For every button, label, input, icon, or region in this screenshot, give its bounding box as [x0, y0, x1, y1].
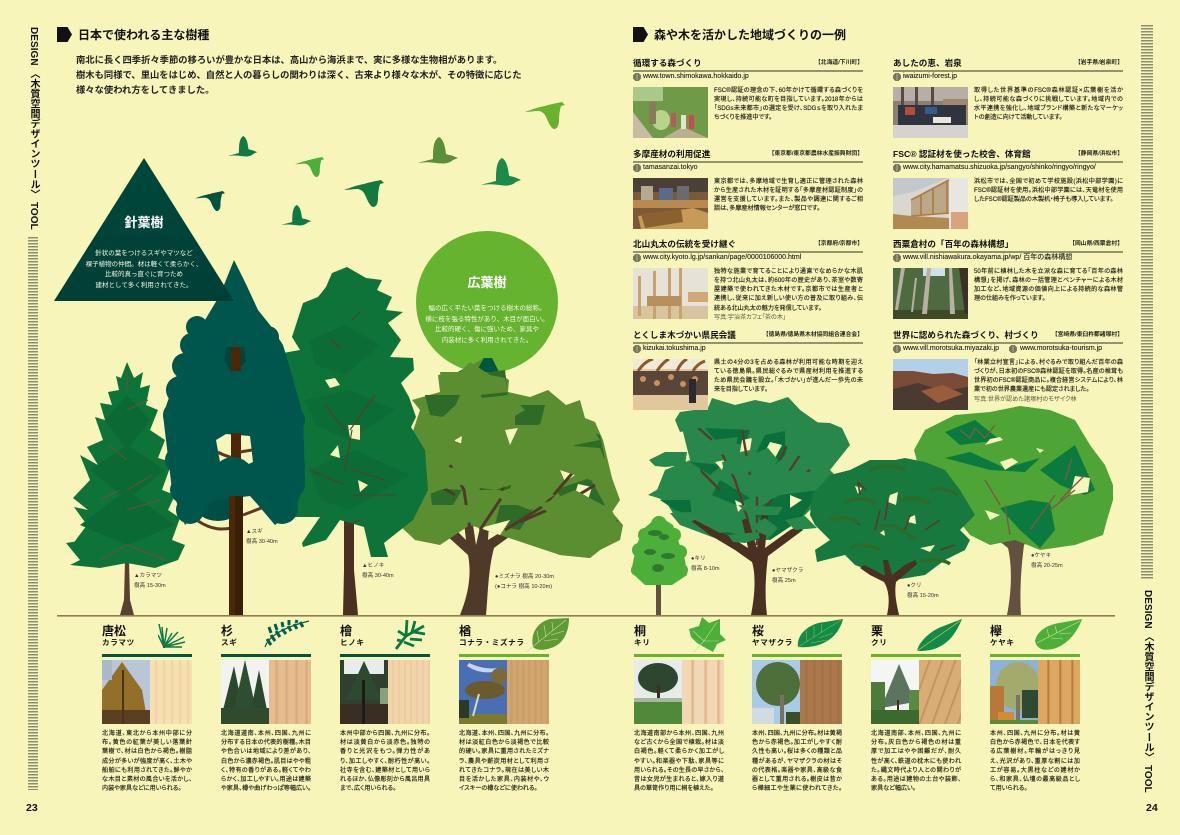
tree label: kiri: 樹高 8-10m — [691, 566, 720, 572]
species: keyaki: ら、和家具、仏壇の最高級品とし — [990, 776, 1080, 783]
species: kiri: 白褐色。軽くて柔らかく加工がし — [634, 748, 724, 755]
species: sugi: スギ — [221, 638, 237, 647]
card: morotsuka — [893, 330, 1123, 410]
card: tama: tamasanzai.tokyo — [643, 164, 697, 171]
species: kiri: など古くから全国で植栽。材は淡 — [634, 739, 724, 746]
species: konara mizunara: イスキーの樽などに使われる。 — [459, 785, 537, 792]
species: kuri: 家具など幅広い。 — [871, 785, 916, 792]
card: iwaizumi: トの創造に向けて活動しています。 — [974, 114, 1062, 121]
species: sugi: く、特有の香りがある。軽くてやわ — [221, 767, 311, 774]
card: nishiawakura: 【岡山県/西粟倉村】 — [1069, 241, 1123, 247]
species: kiri: 具の箪笥作り用に桐を植えた。 — [634, 785, 713, 792]
card: iwaizumi: あしたの恵、岩泉 — [893, 58, 962, 68]
species: konara mizunara: ラ、農具や薪炭用材として利用さ — [459, 758, 549, 765]
conifer description: 建材として多く利用されてきた。 — [96, 282, 192, 288]
card: nishiawakura: 構想」を掲げ、森林の一括管理とベンチャーによる木材 — [974, 277, 1123, 284]
card: shimokawa: 循環する森づくり — [633, 58, 702, 68]
flock of birds — [195, 102, 565, 225]
card: iwaizumi: 【岩手県/岩泉町】 — [1075, 60, 1123, 66]
card: tokushima — [633, 330, 863, 410]
tree label: kiri — [691, 556, 720, 572]
species: hinoki: 材は淡黄白から淡赤色。独特の — [340, 739, 430, 746]
tree: karamatsu larch — [66, 362, 185, 615]
species: karamatsu: 唐松 — [102, 624, 126, 638]
species: karamatsu: 成分が多いが強度が高く、土木や — [102, 758, 192, 765]
conifer description — [86, 250, 202, 288]
leaf icon: cherry — [797, 619, 843, 649]
species: kuri: 性が高く、鉄道の枕木にも使われ — [871, 758, 961, 765]
species: yamazakura: ヤマザクラ — [752, 638, 793, 647]
photo: cedar — [221, 660, 269, 724]
species: yamazakura: 本州、四国、九州に分布。材は黄褐 — [752, 730, 842, 737]
card: shimokawa: 実現し、持続可能な町を目指しています。2018年からは — [714, 96, 863, 103]
photo: crowd in wooden hall — [633, 359, 708, 410]
tree label: karamatsu: ▲カラマツ — [134, 573, 162, 579]
species: karamatsu: カラマツ — [102, 638, 135, 647]
tree: sugi cedar — [163, 260, 305, 615]
tree: keyaki zelkova — [914, 406, 1113, 615]
card: kyoto: 統ある北山丸太の魅力を発信しています。 — [714, 305, 822, 312]
species: kiri: 用いられる。その生長の早さから、 — [634, 767, 724, 774]
tree label: kuri — [907, 582, 939, 599]
broadleaf description: 横に枝を張る特性があり、木目が面白い。 — [425, 316, 549, 323]
tree: yamazakura cherry — [648, 397, 850, 615]
card: nishiawakura: 西粟倉村の「百年の森林構想」 — [893, 239, 1013, 249]
left sidebar title: DESIGN 〈木質空間デザインツール〉 TOOL — [28, 27, 39, 230]
card: shimokawa: 「SDGs未来都市」の選定を受け、SDGｓを取り入れたま — [714, 105, 863, 112]
photo: tama wood info center — [633, 178, 708, 229]
photo: hinoki — [340, 660, 388, 724]
card: nishiawakura: 理の仕組みを作っています。 — [974, 295, 1045, 302]
card: tama: 東京都では、多摩地域で生育し適正に管理された森林 — [714, 178, 863, 185]
species: konara mizunara: れてきたコナラ。現在は美しい木 — [459, 767, 549, 774]
species: hinoki: れるほか、仏像彫刻から風呂用具 — [340, 776, 430, 783]
tree label: hinoki: ▲ヒノキ — [362, 563, 384, 569]
tree label: karamatsu: 樹高 15-30m — [134, 583, 166, 589]
tree label: yamazakura: ●ヤマザクラ — [772, 568, 803, 574]
species: kuri: た。縄文時代より人との関わりが — [871, 767, 961, 774]
card: tama: から生産された木材を証明する「多摩産材認証制度」の — [714, 187, 863, 194]
species: kuri: 栗 — [871, 624, 883, 638]
card: tokushima: 来を目指しています。 — [714, 386, 768, 393]
card: nishiawakura: 50年前に植林した木を立派な森に育てる「百年の森林 — [974, 268, 1123, 275]
species: konara mizunara: 的硬い。家具に重用されたミズナ — [459, 748, 549, 755]
leaf icon: paulownia — [689, 617, 726, 653]
species: keyaki: 欅 — [990, 624, 1002, 638]
broadleaf title: 広葉樹 — [467, 275, 506, 290]
broadleaf description: 比較的硬く、傷に強いため、家具や — [435, 326, 539, 333]
species: sugi: 白色から濃赤褐色。肌目はやや粗 — [221, 758, 311, 765]
intro text: 様々な使われ方をしてきました。 — [76, 85, 214, 95]
tree label: sugi: ▲スギ — [246, 529, 263, 535]
card: morotsuka: 世界初のFSC®認証商品に。複合経営システムにより、林 — [974, 377, 1123, 384]
right sidebar title: DESIGN 〈木質空間デザインツール〉 TOOL — [1142, 590, 1153, 793]
photo: cedar forest — [893, 268, 968, 319]
broadleaf callout text — [425, 275, 549, 344]
species: sugi: や家具、樽や曲げわっぱ等幅広い。 — [221, 785, 311, 792]
card: kyoto: 屋建築で使われてきた木材です。京都市では生産者と — [714, 286, 863, 293]
tree label: sugi — [246, 528, 278, 545]
tree label: mizunara: ●ミズナラ 樹高 20-30m — [495, 574, 554, 580]
card: shimokawa — [633, 58, 863, 138]
card: tama: 運営を支援しています。また、製品や調達に関するご相 — [714, 196, 863, 203]
card: hamamatsu: 浜松市では、全国で初めて学校施設(浜松中部学園)に — [974, 178, 1123, 185]
card: tokushima: 県土の4分の3を占める森林が利用可能な時期を迎え — [714, 359, 863, 366]
card: tokushima: とくしま木づかい県民会議 — [633, 330, 736, 340]
tree label: mizunara: (●コナラ 樹高 10-20m) — [495, 584, 552, 590]
species: hinoki: り、加工しやすく、耐朽性が高い。 — [340, 758, 430, 765]
tree label: yamazakura: 樹高 25m — [772, 578, 796, 584]
species: hinoki: 檜 — [340, 624, 352, 638]
species: keyaki: 本州、四国、九州に分布。材は黄 — [990, 730, 1080, 737]
card: shimokawa: FSC®認証の理念の下、60年かけて循環する森づくりを — [714, 87, 863, 94]
species: yamazakura — [752, 620, 842, 794]
card: morotsuka: 業で初の世界農業遺産にも認定されました。 — [974, 386, 1089, 393]
intro text — [76, 54, 522, 95]
card: morotsuka: づくりが、日本初のFSC®森林認証を取得。名産の椎茸も — [974, 368, 1123, 375]
conifer callout triangle — [54, 158, 234, 301]
card: kyoto: 独特な施業で育てることにより通直でなめらかな木肌 — [714, 268, 863, 275]
tree label: keyaki: ●ケヤキ — [1031, 553, 1051, 559]
card: kyoto: 北山丸太の伝統を受け継ぐ — [633, 239, 736, 249]
conifer description: 裸子植物の仲間。材は軽くて柔らかく、 — [86, 260, 202, 268]
tree label: keyaki — [1031, 552, 1063, 569]
conifer description: 針状の葉をつけるスギやマツなど — [95, 250, 193, 257]
photo: paulownia — [634, 660, 682, 724]
intro text: 樹木も同様で、里山をはじめ、自然と人の暮らしの関わりは深く、古来より様々な木が、その特徴に応じた — [76, 70, 522, 80]
species: konara mizunara: 北海道、本州、四国、九州に分布。 — [459, 730, 549, 737]
tree: hinoki cypress — [283, 267, 428, 615]
leaf icon: cedar — [264, 620, 310, 648]
species: sugi: 分布する日本の代表的樹種。木目 — [221, 739, 311, 746]
card: morotsuka: www.morotsuka-tourism.jp — [1020, 345, 1102, 352]
card: shimokawa: ちづくりを推進中です。 — [714, 114, 772, 121]
card: nishiawakura — [893, 239, 1123, 319]
species: sugi: らかく、加工しやすい。用途は建築 — [221, 776, 311, 783]
intro text: 南北に長く四季折々季節の移ろいが豊かな日本は、高山から海浜まで、実に多様な生物相があります。 — [76, 55, 502, 65]
species: kiri: キリ — [634, 638, 650, 647]
species: yamazakura: 器として重用される。樹皮は昔か — [752, 776, 842, 783]
species: kuri: 厚で加工はやや困難だが、耐久 — [871, 748, 961, 755]
species: yamazakura: ら樺細工や生薬に使われてきた。 — [752, 785, 842, 792]
species: karamatsu: 北海道、東北から本州中部に分 — [102, 730, 192, 737]
broadleaf description: 内装材に多く利用されてきた。 — [442, 337, 532, 344]
card: tokushima: ため県民会議を設立。「木づかい」が進んだ一歩先の未 — [714, 377, 863, 384]
tree: kuri chestnut — [810, 458, 975, 615]
species: karamatsu — [102, 624, 192, 792]
species: kiri: 桐 — [634, 624, 646, 638]
species: hinoki: 香りと光沢をもつ。弾力性があ — [340, 748, 430, 755]
species: sugi: 北海道道南、本州、四国、九州に — [221, 730, 311, 737]
leaf icon: chestnut — [917, 619, 962, 651]
ground line — [57, 615, 1115, 617]
photo: oak — [459, 660, 507, 724]
tree label: sugi: 樹高 30-40m — [246, 539, 278, 545]
species: sugi: や色合いは地域により差があり、 — [221, 748, 311, 755]
photo: zelkova — [990, 660, 1038, 724]
species: karamatsu: 葉樹で、材は白色から褐色。樹脂 — [102, 748, 192, 755]
species: yamazakura: 種があるが、ヤマザクラの材はそ — [752, 758, 842, 765]
species: hinoki: ヒノキ — [340, 638, 365, 647]
species: yamazakura: 色から赤褐色。加工がしやすく耐 — [752, 739, 842, 746]
species: karamatsu: な木目と素材の風合いを活かし、 — [102, 776, 192, 783]
photo: chestnut — [871, 660, 919, 724]
card: iwaizumi — [893, 58, 1123, 138]
species: hinoki — [340, 620, 430, 792]
species: konara mizunara: コナラ・ミズナラ — [459, 638, 525, 647]
photo: larch — [102, 660, 150, 724]
species: karamatsu: 船舶にも利用されてきた。鮮やか — [102, 767, 192, 774]
card: hamamatsu: 【静岡県/浜松市】 — [1075, 151, 1123, 157]
card: morotsuka: 世界に認められた森づくり、村づくり — [893, 330, 1039, 340]
card: morotsuka: 写真:世界が認めた諸塚村のモザイク林 — [974, 396, 1077, 403]
species: keyaki: ケヤキ — [990, 638, 1015, 647]
species: kiri: やすい。和楽器や下駄、家具等に — [634, 758, 724, 765]
species: kuri — [871, 620, 961, 794]
tree label: karamatsu — [134, 572, 166, 589]
card: hamamatsu: FSC®認証材を使用。浜松中部学園には、天竜材を使用 — [974, 187, 1123, 194]
photo: kitayama log cafe — [633, 268, 708, 319]
species: keyaki: え、光沢があり、重厚な割には加 — [990, 758, 1080, 765]
leaf icon: hinoki — [394, 620, 426, 650]
heading: main tree species: 日本で使われる主な樹種 — [78, 28, 209, 42]
card: tokushima: 【徳島県/徳島県木材協同組合連合会】 — [763, 332, 863, 338]
conifer description: 比較的真っ直ぐに育つため — [105, 271, 183, 278]
leaf icon: larch — [158, 624, 186, 648]
card: nishiawakura: www.vill.nishiawakura.okayama.jp/wp/ 百年の森林構想 — [903, 254, 1072, 261]
tree label: kuri: 樹高 15-20m — [907, 593, 939, 599]
leaf icon: oak — [526, 618, 569, 652]
card: kyoto — [633, 239, 863, 321]
heading: regional forest examples: 森や木を活かした地域づくりの一例 — [654, 28, 846, 42]
card: tama — [633, 149, 863, 229]
species: keyaki — [990, 620, 1080, 794]
card: shimokawa: 【北海道/下川町】 — [815, 60, 863, 66]
tree label: kuri: ●クリ — [907, 583, 922, 589]
card: morotsuka: www.vill.morotsuka.miyazaki.jp — [903, 345, 999, 352]
species: karamatsu: 布。黄色の紅葉が美しい落葉針 — [102, 739, 192, 746]
species: kuri: クリ — [871, 638, 887, 647]
species: kuri: ある。用途は建物の土台や装飾、 — [871, 776, 961, 783]
species: kiri: 北海道南部から本州、四国、九州 — [634, 730, 724, 737]
tree label: kiri: ●キリ — [691, 556, 706, 562]
tree: mizunara oak — [396, 358, 623, 615]
tree label: mizunara — [495, 573, 554, 590]
broadleaf callout circle — [416, 231, 558, 373]
tree label: hinoki: 樹高 30-40m — [362, 573, 394, 579]
page number 24: 24 — [1146, 802, 1158, 814]
species: kiri — [634, 620, 724, 794]
card: iwaizumi: 水平連携を強化し、地域ブランド構築と新たなマーケッ — [974, 105, 1123, 112]
card: tama: 談は、多摩産材情報センターが窓口です。 — [714, 205, 820, 212]
species: sugi: 杉 — [221, 624, 233, 638]
photo: children in forest — [633, 87, 708, 138]
species: yamazakura: 桜 — [752, 624, 764, 638]
tree label: hinoki — [362, 562, 394, 579]
leaf icon: zelkova — [1035, 619, 1082, 651]
card: tama: 【東京都/東京都農林水産振興財団】 — [769, 151, 863, 157]
species: kuri: 北海道南部、本州、四国、九州に — [871, 730, 961, 737]
species: konara mizunara — [459, 618, 569, 792]
species: konara mizunara: 楢 — [459, 624, 471, 638]
card: kyoto: を持つ北山丸太は、約600年の歴史があり、茶室や数寄 — [714, 277, 863, 284]
tree label: keyaki: 樹高 20-25m — [1031, 563, 1063, 569]
species: keyaki: て用いられる。 — [990, 785, 1027, 792]
species: yamazakura: 久性も高い。桜は多くの種類と品 — [752, 748, 842, 755]
species: konara mizunara: 材は淡紅白色から淡褐色で比較 — [459, 739, 549, 746]
card: hamamatsu: したFSC®認証製品の木製机・椅子も導入しています。 — [974, 196, 1113, 203]
species: yamazakura: の代表格。楽器や家具、高級な食 — [752, 767, 842, 774]
photo: cherry — [752, 660, 800, 724]
photo: mosaic forest mountains — [893, 359, 968, 410]
species: sugi — [221, 620, 311, 792]
card: shimokawa: www.town.shimokawa.hokkaido.jp — [643, 73, 749, 80]
card: iwaizumi: 取得した世界基準のFSC®森林認証×広葉樹を活か — [974, 87, 1123, 94]
species: keyaki: 白色から赤褐色で、日本を代表す — [990, 739, 1080, 746]
species: hinoki: 社寺を含む、建築材として用いら — [340, 767, 430, 774]
card: tama: 多摩産材の利用促進 — [633, 149, 710, 159]
species: kuri: 分布。灰白色から褐色の材は重 — [871, 739, 961, 746]
card: iwaizumi: し、持続可能な森づくりに挑戦しています。地域内での — [974, 96, 1123, 103]
species: kiri: 昔は女児が生まれると、嫁入り道 — [634, 776, 724, 783]
card: iwaizumi: iwaizumi-forest.jp — [903, 73, 957, 80]
photo: wooden school corridor — [893, 178, 968, 229]
species: karamatsu: 内装や家具などに用いられる。 — [102, 785, 181, 792]
card: kyoto: www.city.kyoto.lg.jp/sankan/page/0000106000.html — [643, 254, 801, 261]
card: kyoto: 連携し、従来に加え新しい使い方の普及に取り組み、伝 — [714, 295, 863, 302]
card: morotsuka: 【宮崎県/東臼杵郡諸塚村】 — [1052, 332, 1123, 338]
card: tokushima: kizukai.tokushima.jp — [643, 345, 706, 352]
card: hamamatsu: www.city.hamamatsu.shizuoka.jp/sangyo/shinko/ringyo/ringyo/ — [903, 164, 1096, 171]
photo: group in snowy forest — [893, 87, 968, 138]
card: tokushima: ている徳島県。県民総ぐるみで県産材利用を推進する — [714, 368, 863, 375]
species: hinoki: 本州中部から四国、九州に分布。 — [340, 730, 430, 737]
species: konara mizunara: 目を活かした家具、内装材や、ウ — [459, 776, 549, 783]
species: hinoki: まで、広く用いられる。 — [340, 785, 396, 792]
card: morotsuka: 「林業立村宣言」による、村ぐるみで取り組んだ百年の森 — [974, 359, 1123, 366]
conifer title: 針葉樹 — [124, 215, 164, 230]
species: keyaki: 工が容易。大黒柱などの建材か — [990, 767, 1080, 774]
broadleaf description — [425, 304, 549, 344]
tree: kiri paulownia — [631, 516, 688, 615]
broadleaf description: 幅の広く平たい葉をつける樹木の総称。 — [428, 305, 546, 312]
card: hamamatsu: FSC® 認証材を使った校舎、体育館 — [893, 149, 1031, 159]
species: keyaki: る広葉樹材。年輪がはっきり見 — [990, 748, 1080, 755]
card: nishiawakura: 加工など、地域資源の価値向上による持続的な森林管 — [974, 286, 1123, 293]
card: kyoto: 【京都府/京都市】 — [815, 241, 863, 247]
page number 23: 23 — [26, 802, 38, 814]
card: kyoto: 写真:宇治茶カフェ「茶の木」 — [714, 314, 786, 321]
tree label: yamazakura — [772, 567, 803, 584]
card: hamamatsu — [893, 149, 1123, 229]
